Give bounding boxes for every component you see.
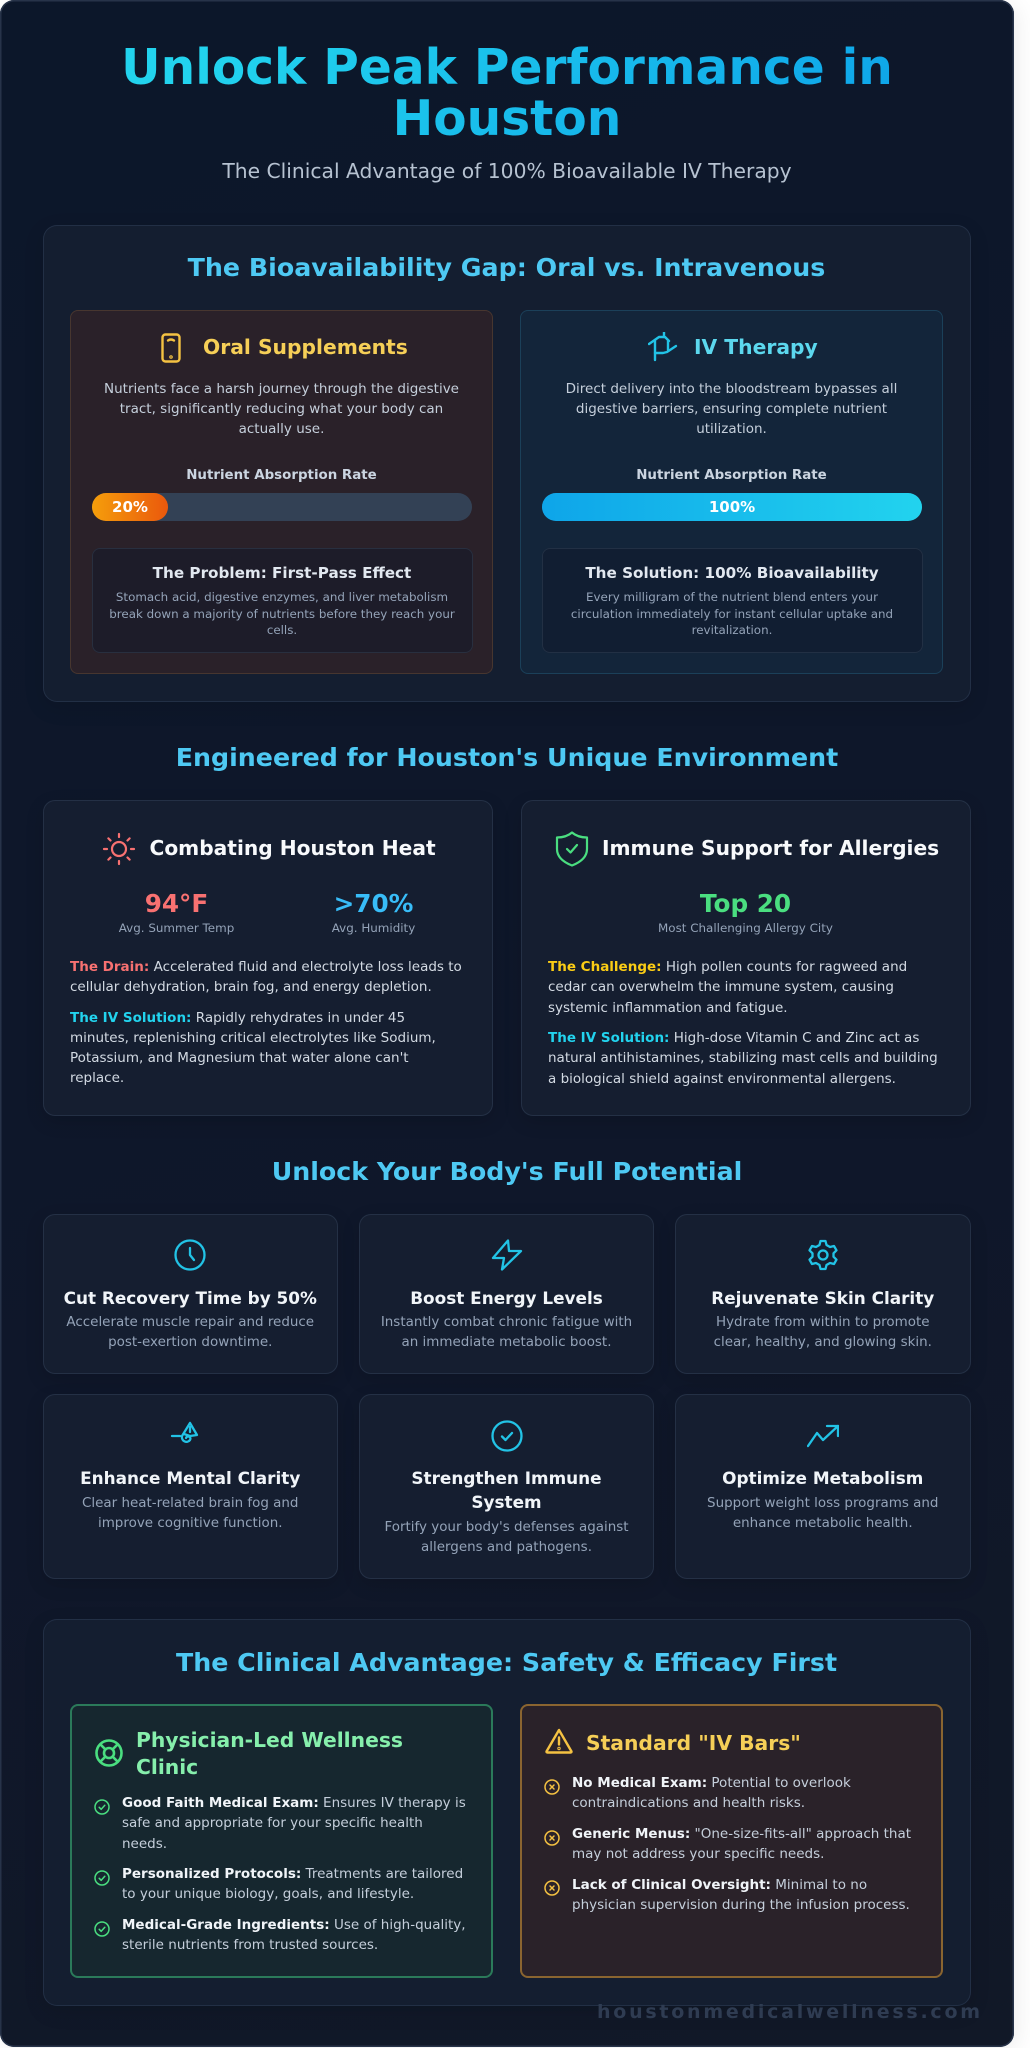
iv description: Direct delivery into the bloodstream bypasses all: [566, 381, 897, 397]
text: iv solution: [70, 1010, 436, 1086]
check icon 3: [94, 1921, 110, 1937]
iv rate label: Nutrient Absorption Rate: [636, 468, 827, 483]
title: [0, 42, 1014, 144]
stat: humidity: >70%: [334, 889, 413, 918]
title: Unlock Peak Performance in: [121, 40, 893, 96]
stat label: humidity: Avg. Humidity: [332, 921, 415, 935]
text: the challenge: [548, 959, 907, 1016]
icon: smartphone: [161, 333, 181, 363]
icon: warning triangle: [545, 1728, 573, 1754]
callout text: Stomach acid, digestive enzymes, and liver metabolism: [116, 590, 448, 604]
iv description: digestive barriers, ensuring complete nutrient: [576, 401, 887, 417]
allergy title: Immune Support for Allergies: [602, 836, 939, 860]
card text: [381, 1315, 632, 1350]
heading: full potential: Unlock Your Body's Full Potential: [272, 1157, 742, 1186]
callout text: break down a majority of nutrients before they reach your: [109, 607, 455, 621]
text: iv solution: natural antihistamines, stabilizing mast cells and building: [548, 1050, 938, 1066]
card text: [66, 1315, 314, 1350]
x icon 3: [544, 1880, 560, 1896]
text: the challenge: cedar can overwhelm the immune system, causing: [548, 979, 894, 995]
card title: Strengthen Immune: [411, 1468, 602, 1488]
callout title: The Solution: 100% Bioavailability: [585, 564, 879, 582]
heading: bioavailability gap: The Bioavailability Gap: Oral vs. Intravenous: [188, 253, 825, 282]
card text: [384, 1520, 629, 1555]
oral header: [161, 333, 408, 363]
item: ingredients: Medical-Grade Ingredients: Use of high-quality,: [122, 1917, 466, 1933]
title: Houston: [393, 90, 621, 146]
card text: [82, 1496, 298, 1531]
card text: Clear heat-related brain fog and: [82, 1496, 298, 1511]
text: iv solution: [548, 1030, 938, 1087]
text: iv solution: replace.: [70, 1070, 124, 1086]
text: the drain: [70, 959, 462, 995]
item: medical exam: safe and appropriate for your specific health: [122, 1815, 423, 1831]
clinic title: Physician-Led Wellness: [136, 1728, 403, 1752]
panel: physician-led clinic: [70, 1704, 493, 1978]
card text: clear, healthy, and glowing skin.: [714, 1335, 932, 1350]
item: ingredients: sterile nutrients from trusted sources.: [122, 1937, 378, 1953]
subtitle: The Clinical Advantage of 100% Bioavailable IV Therapy: [222, 158, 792, 182]
bar: oral 20%: [92, 493, 472, 521]
card text: [707, 1496, 938, 1531]
callout text: revitalization.: [692, 623, 772, 637]
item: medical exam: needs.: [122, 1836, 167, 1852]
card text: Accelerate muscle repair and reduce: [66, 1315, 314, 1330]
icon: clock: [174, 1239, 206, 1271]
card text: Instantly combat chronic fatigue with: [381, 1315, 632, 1330]
icon: brain: [170, 1422, 198, 1443]
bar fill 20%: 20%: [112, 498, 148, 516]
callout text: [109, 590, 455, 637]
callout text: Every milligram of the nutrient blend enters your: [586, 590, 878, 604]
oral description: Nutrients face a harsh journey through the digestive: [104, 381, 459, 397]
stat: top 20: Top 20: [700, 889, 791, 918]
item: protocols: to your unique biology, goals, and lifestyle.: [122, 1886, 414, 1902]
card title: Rejuvenate Skin Clarity: [711, 1288, 934, 1308]
stat: temperature: 94°F: [145, 889, 208, 918]
bar fill 100%: 100%: [709, 498, 755, 516]
callout title: The Problem: First-Pass Effect: [153, 564, 411, 582]
item: oversight: [572, 1875, 910, 1916]
item: medical exam: [122, 1795, 466, 1852]
card text: [714, 1315, 932, 1350]
text: iv solution: Potassium, and Magnesium that water alone can't: [70, 1050, 409, 1066]
iv header: [648, 332, 818, 362]
card text: improve cognitive function.: [98, 1516, 283, 1531]
callout: 100% bioavailability: [542, 548, 922, 653]
text: the drain: cellular dehydration, brain fog, and energy depletion.: [70, 979, 432, 995]
panel: standard iv bars: [520, 1704, 943, 1978]
card text: post-exertion downtime.: [108, 1335, 272, 1350]
icon: trending up: [807, 1424, 839, 1448]
oral description: actually use.: [239, 421, 324, 437]
card: energy: [359, 1214, 654, 1374]
icon: iv: [648, 332, 678, 362]
allergy header: [556, 831, 939, 867]
item: oversight: physician supervision during the infusion process.: [572, 1897, 910, 1913]
card: metabolism: [675, 1394, 970, 1579]
card title: Enhance Mental Clarity: [80, 1468, 300, 1488]
iv description: utilization.: [696, 421, 767, 437]
icon: shield check: [556, 831, 588, 867]
item: no exam: No Medical Exam: Potential to overlook: [572, 1775, 851, 1791]
bar: iv 100%: [542, 493, 922, 521]
card: recovery time: [42, 1214, 338, 1374]
heading: clinical advantage: The Clinical Advantage: Safety & Efficacy First: [176, 1648, 837, 1677]
text: the challenge: systemic inflammation and fatigue.: [548, 1000, 788, 1016]
clinic title: [136, 1728, 403, 1778]
item: no exam: [572, 1775, 851, 1811]
icon: gear: [808, 1240, 838, 1270]
card text: Hydrate from within to promote: [716, 1315, 930, 1330]
heading: houston environment: Engineered for Houston's Unique Environment: [176, 743, 838, 772]
item: generic menus: may not address your specific needs.: [572, 1846, 824, 1862]
oral description: tract, significantly reducing what your body can: [120, 401, 443, 417]
watermark: houstonmedicalwellness.com: [597, 2001, 983, 2023]
heat header: [102, 832, 436, 866]
icon: sun: [102, 832, 136, 866]
item: protocols: Personalized Protocols: Treatments are tailored: [122, 1866, 463, 1882]
text: iv solution: a biological shield against environmental allergens.: [548, 1071, 896, 1087]
item: medical exam: Good Faith Medical Exam: Ensures IV therapy is: [122, 1795, 466, 1811]
iv description: [566, 381, 897, 437]
text: the drain: The Drain: Accelerated fluid and electrolyte loss leads to: [70, 959, 462, 975]
oral rate label: Nutrient Absorption Rate: [186, 468, 377, 483]
bars title: Standard "IV Bars": [586, 1731, 801, 1755]
x icon 2: [544, 1830, 560, 1846]
item: protocols: [122, 1866, 463, 1902]
text: the challenge: The Challenge: High pollen counts for ragweed and: [548, 959, 907, 975]
panel: allergy support: [520, 800, 970, 1116]
panel: iv therapy: [520, 310, 943, 674]
card text: Support weight loss programs and: [707, 1496, 938, 1511]
item: oversight: Lack of Clinical Oversight: Minimal to no: [572, 1877, 867, 1893]
clinic title: Clinic: [136, 1754, 198, 1778]
panel: clinical advantage: [42, 1619, 970, 2006]
card title: Boost Energy Levels: [410, 1288, 603, 1308]
card: skin clarity: [675, 1214, 970, 1374]
text: iv solution: minutes, replenishing critical electrolytes like Sodium,: [70, 1030, 436, 1046]
oral title: Oral Supplements: [203, 335, 408, 359]
bar fill 100%: [542, 493, 922, 521]
panel: houston heat: [42, 800, 493, 1116]
card text: an immediate metabolic boost.: [401, 1335, 612, 1350]
item: ingredients: [122, 1917, 466, 1953]
card title: Optimize Metabolism: [722, 1468, 923, 1488]
card title: System: [471, 1492, 542, 1512]
icon: lifebuoy: [95, 1739, 123, 1767]
item: generic menus: Generic Menus: "One-size-fits-all" approach that: [572, 1826, 911, 1842]
card text: allergens and pathogens.: [421, 1540, 592, 1555]
text: iv solution: The IV Solution: High-dose Vitamin C and Zinc act as: [548, 1030, 919, 1046]
card: immune system: [359, 1394, 654, 1579]
card text: enhance metabolic health.: [733, 1516, 913, 1531]
check icon 1: [94, 1799, 110, 1815]
panel: oral supplements: [70, 310, 493, 674]
callout text: [571, 590, 893, 637]
icon: check circle: [491, 1420, 523, 1452]
card title: [411, 1468, 602, 1512]
panel: bioavailability gap: [42, 225, 970, 702]
stat label: allergy city: Most Challenging Allergy City: [658, 921, 833, 935]
card: mental clarity: [42, 1394, 338, 1579]
callout text: circulation immediately for instant cellular uptake and: [571, 607, 893, 621]
text: iv solution: The IV Solution: Rapidly rehydrates in under 45: [70, 1010, 405, 1026]
check icon 2: [94, 1870, 110, 1886]
card text: Fortify your body's defenses against: [384, 1520, 629, 1535]
callout text: cells.: [267, 623, 297, 637]
card title: Cut Recovery Time by 50%: [64, 1288, 317, 1308]
item: no exam: contraindications and health risks.: [572, 1795, 805, 1811]
bar fill 20%: [92, 493, 168, 521]
oral description: [104, 381, 459, 437]
item: generic menus: [572, 1824, 911, 1865]
callout: first-pass effect: [92, 548, 472, 653]
iv title: IV Therapy: [694, 335, 818, 359]
icon: bolt: [492, 1239, 522, 1271]
heat title: Combating Houston Heat: [150, 836, 436, 860]
stat label: temperature: Avg. Summer Temp: [119, 921, 234, 935]
x icon 1: [544, 1779, 560, 1795]
